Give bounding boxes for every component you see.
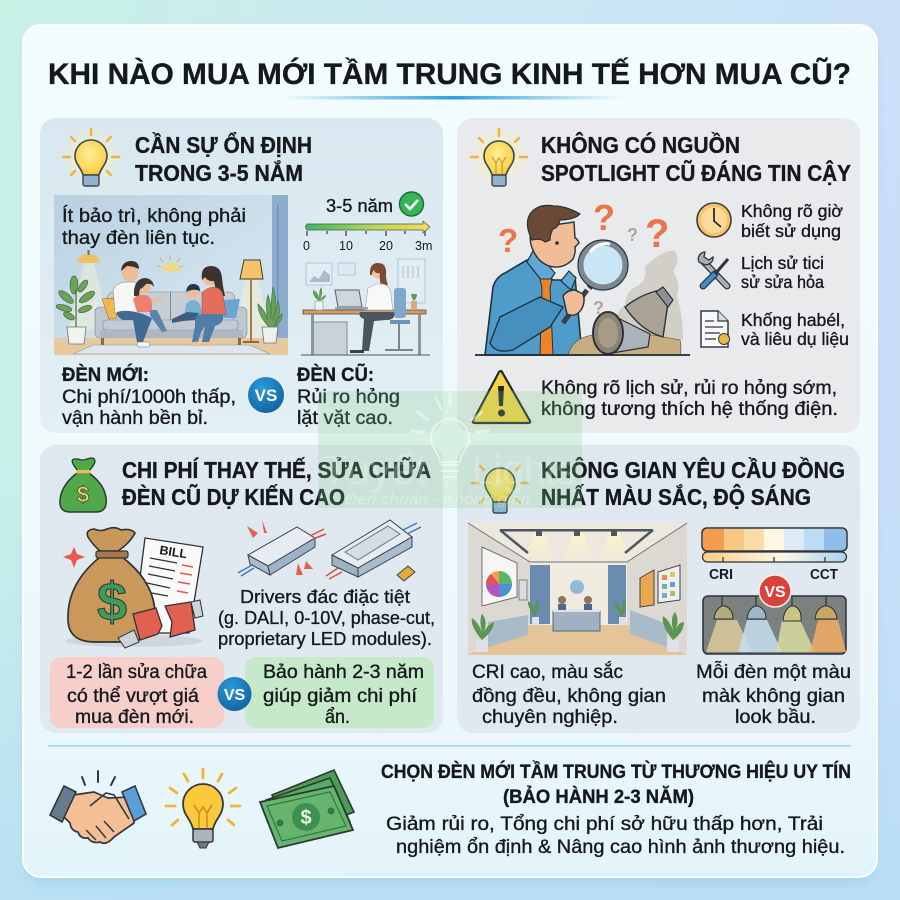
icon: handshake	[50, 771, 146, 843]
panel: uniform colour and brightness	[457, 445, 860, 733]
icon: banknotes: $	[300, 807, 312, 829]
text: special drivers: proprietary LED modules).	[218, 628, 432, 649]
badge: VS: VS	[224, 687, 246, 704]
question marks: ?	[593, 197, 615, 238]
illustration: family living room	[54, 195, 288, 355]
panel: stability over 3-5 years	[40, 118, 443, 433]
timeline chart: 0	[303, 239, 310, 253]
text: mismatched colour	[696, 661, 851, 728]
icon: light bulb with filament	[469, 127, 529, 187]
title: KHI NÀO MUA MỚI TẦM TRUNG KINH TẾ HƠN MUA CŨ?	[48, 57, 851, 91]
conclusion text	[381, 761, 851, 858]
icon: document	[701, 311, 730, 347]
conclusion text: CHỌN ĐÈN MỚI TẦM TRUNG TỪ THƯƠNG HIỆU UY TÍN	[381, 761, 851, 783]
watermark: Lights	[472, 446, 576, 493]
callout: repair cost: 1-2 lần sửa chữa	[66, 662, 207, 683]
illustration: person working at desk	[301, 259, 430, 355]
panel: repair costs	[40, 445, 443, 733]
comparison: new lamps: Chi phí/1000h thấp,	[62, 387, 236, 408]
comparison: new lamps: ĐÈN MỚI:	[62, 364, 149, 386]
callout: repair cost: có thể vượt giá	[67, 686, 199, 707]
comparison: old lamps: lặt vặt cao.	[297, 408, 393, 429]
illustration: money bag, bill and broken tube	[63, 528, 203, 648]
heading: ĐÈN CŨ DỰ KIẾN CAO	[122, 483, 345, 510]
icon: light bulb	[61, 127, 121, 187]
warning text: không tương thích hệ thống điện.	[541, 399, 838, 420]
text: repair history: Lịch sử tici	[741, 253, 824, 273]
badge: VS	[248, 377, 284, 413]
text: low maintenance: thay đèn liên tục.	[62, 227, 215, 249]
heading	[541, 456, 845, 510]
text: mismatched colour: màk không gian	[702, 686, 845, 707]
heading: KHÔNG CÓ NGUỒN	[541, 131, 740, 158]
illustration: mismatched lamps	[703, 596, 846, 654]
watermark	[318, 391, 582, 508]
heading	[541, 131, 851, 186]
timeline chart	[303, 192, 432, 253]
icon: green money bag	[60, 458, 106, 512]
text: repair history	[741, 253, 824, 292]
watermark: Tuyết	[322, 446, 427, 493]
heading: SPOTLIGHT CŨ ĐÁNG TIN CẬY	[541, 159, 851, 186]
text: high CRI: chuyên nghiệp.	[482, 707, 618, 728]
text: special drivers: Drivers đác điặc tiệt	[240, 586, 410, 607]
timeline chart: 3m	[415, 239, 432, 253]
heading: KHÔNG GIAN YÊU CẦU ĐỒNG	[541, 456, 845, 483]
illustration: LED drivers	[238, 520, 421, 581]
heading	[122, 455, 431, 510]
callout: warranty: ẩn.	[325, 707, 350, 728]
text: high CRI: đồng đều, không gian	[472, 686, 666, 707]
callout: warranty: giúp giảm chi phí	[263, 686, 418, 707]
callout: repair cost	[50, 657, 224, 728]
text: mismatched colour: Mỗi đèn một màu	[696, 661, 851, 683]
heading: CHI PHÍ THAY THẾ, SỬA CHỮA	[122, 455, 431, 483]
callout: repair cost: mua đèn mới.	[75, 707, 194, 728]
conclusion text: Giảm rủi ro, Tổng chi phí sở hữu thấp hơn, Trải	[386, 813, 823, 835]
comparison: new lamps	[62, 364, 236, 429]
comparison: new lamps: vận hành bền bỉ.	[62, 408, 208, 429]
text: no label and documents	[741, 310, 849, 349]
text: high CRI: CRI cao, màu sắc	[472, 661, 623, 683]
callout: warranty	[245, 657, 434, 728]
text: unknown hours: biết sử dụng	[741, 221, 841, 241]
comparison: old lamps	[297, 364, 400, 429]
badge: VS: VS	[255, 386, 277, 405]
callout: warranty: Bảo hành 2-3 năm	[263, 662, 424, 683]
colour temperature scale: CCT	[810, 567, 838, 583]
text: mismatched colour: look bầu.	[735, 707, 816, 728]
text: low maintenance: Ít bảo trì, không phải	[62, 204, 246, 227]
comparison: old lamps: Rủi ro hỏng	[297, 387, 400, 408]
comparison: old lamps: ĐÈN CŨ:	[297, 364, 374, 386]
conclusion text: nghiệm ổn định & Nâng cao hình ảnh thương hiệu.	[396, 836, 845, 858]
question marks: ?	[627, 225, 638, 245]
text: no label and documents: Khống habél,	[741, 310, 845, 330]
question marks: ?	[498, 222, 518, 259]
icon: banknotes	[260, 770, 354, 848]
illustration: man inspecting old lamps	[475, 205, 690, 355]
text: unknown hours	[741, 201, 843, 241]
icon: green money bag: $	[77, 482, 89, 507]
heading: NHẤT MÀU SẮC, ĐỘ SÁNG	[541, 483, 811, 510]
question marks: ?	[645, 212, 669, 256]
timeline chart: 3-5 năm	[326, 196, 393, 216]
text: no label and documents: và liêu dụ liệu	[741, 329, 849, 349]
illustration: showroom interior	[468, 523, 687, 655]
icon: tools	[698, 252, 728, 286]
text: unknown hours: Không rõ giờ	[741, 201, 843, 221]
icon: warning triangle	[473, 371, 530, 423]
heading	[135, 131, 312, 186]
icon: clock	[697, 203, 731, 237]
text: low maintenance	[62, 204, 246, 249]
question marks	[498, 197, 669, 318]
text: repair history: sử sửa hỏa	[741, 272, 824, 292]
heading: CẦN SỰ ỔN ĐỊNH	[135, 131, 312, 158]
watermark: Đèn chuẩn - Không gian	[345, 491, 530, 508]
panel: no reliable source	[457, 118, 860, 433]
badge: VS	[218, 677, 252, 711]
warning text	[541, 378, 838, 420]
icon: light bulb	[472, 466, 528, 513]
badge: VS	[759, 575, 791, 607]
icon: light bulb	[166, 769, 240, 848]
badge: VS: VS	[764, 584, 786, 601]
heading: TRONG 3-5 NẮM	[135, 159, 303, 186]
colour temperature scale	[702, 528, 847, 583]
conclusion text: (BẢO HÀNH 2-3 NĂM)	[503, 786, 694, 808]
text: special drivers: (g. DALI, 0-10V, phase-cut,	[218, 607, 435, 628]
timeline chart: 10	[339, 239, 353, 253]
warning text: Không rõ lịch sử, rủi ro hỏng sớm,	[541, 378, 837, 399]
question marks: ?	[593, 298, 604, 318]
timeline chart: 20	[379, 239, 393, 253]
colour temperature scale: CRI	[709, 567, 733, 583]
text: high CRI	[472, 661, 666, 728]
illustration: money bag, bill and broken tube: BILL	[159, 543, 189, 561]
illustration: money bag, bill and broken tube: $	[97, 572, 127, 632]
text: special drivers	[218, 586, 435, 649]
